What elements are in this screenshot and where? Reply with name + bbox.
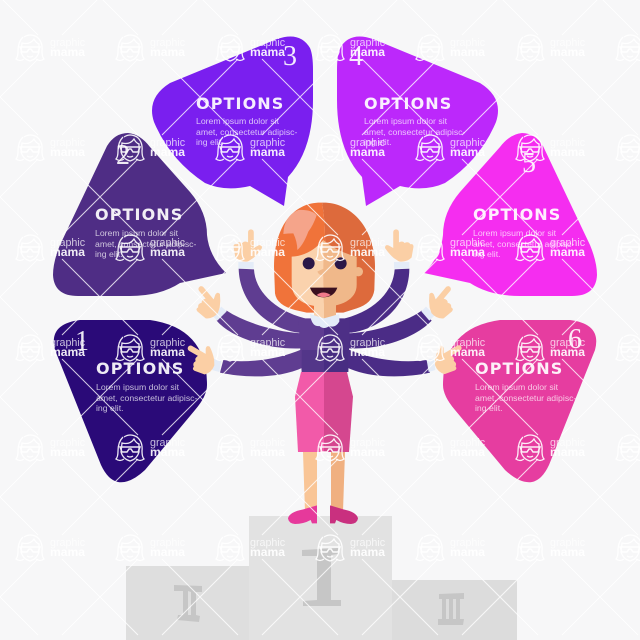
watermark logos: mama <box>50 445 85 459</box>
watermark logos: graphic <box>250 337 286 349</box>
panel: option 6 <box>443 320 596 482</box>
watermark logos: mama <box>450 345 485 359</box>
watermark logos: graphic <box>450 37 486 49</box>
bubble 5 <box>424 133 597 296</box>
watermark logos: graphic <box>350 237 386 249</box>
text 4: amet, consectetur adipisc- <box>364 127 466 137</box>
number 5: 5 <box>522 148 536 179</box>
watermark logos: graphic <box>50 237 86 249</box>
podium: first place step <box>249 516 392 640</box>
watermark logos: graphic <box>250 137 286 149</box>
legs <box>303 452 345 512</box>
watermark logos: graphic <box>550 137 586 149</box>
watermark logos: mama <box>50 145 85 159</box>
heading 3: OPTIONS <box>196 94 284 113</box>
right arms <box>345 269 432 376</box>
text 1: ing elit. <box>96 403 124 413</box>
heading 1: OPTIONS <box>96 359 184 378</box>
text 5: amet, consectetur adipisc- <box>473 239 575 249</box>
watermark logos: graphic <box>150 437 186 449</box>
watermark logos: mama <box>250 545 285 559</box>
podium: third place step <box>385 580 517 640</box>
text 1: Lorem ipsum dolor sit <box>96 382 180 392</box>
text 2: amet, consectetur adipisc- <box>95 239 197 249</box>
watermark logos: mama <box>150 445 185 459</box>
shoes <box>288 505 358 524</box>
text 5: ing elit. <box>473 249 501 259</box>
text 3: ing elit. <box>196 137 224 147</box>
watermark logos: mama <box>350 545 385 559</box>
watermark logos: mama <box>450 545 485 559</box>
panel: option 4 <box>337 36 498 206</box>
watermark logos: graphic <box>150 137 186 149</box>
watermark logos: mama <box>550 345 585 359</box>
text 3: amet, consectetur adipisc- <box>196 127 298 137</box>
hands and cuffs <box>179 229 470 378</box>
watermark logos: mama <box>150 145 185 159</box>
torso <box>298 318 350 372</box>
watermark logos: mama <box>150 545 185 559</box>
watermark logos: mama <box>150 345 185 359</box>
eyes <box>303 257 347 269</box>
watermark logos: mama <box>350 345 385 359</box>
watermark logos: graphic <box>350 137 386 149</box>
watermark logos: graphic <box>150 537 186 549</box>
watermark logos: graphic <box>450 537 486 549</box>
watermark logos: graphic <box>250 237 286 249</box>
panel: option 5 <box>424 133 597 296</box>
bubble 2 <box>53 133 226 296</box>
watermark logos: mama <box>350 245 385 259</box>
watermark logos: graphic <box>550 537 586 549</box>
watermark logos: graphic <box>450 437 486 449</box>
text 6: ing elit. <box>475 403 503 413</box>
watermark logos: mama <box>550 45 585 59</box>
number 4: 4 <box>349 41 363 72</box>
watermark logos: graphic <box>550 437 586 449</box>
watermark logos: graphic <box>450 337 486 349</box>
watermark logos: graphic <box>250 437 286 449</box>
watermark logos: mama <box>450 45 485 59</box>
text 2: Lorem ipsum dolor sit <box>95 228 179 238</box>
watermark logos: graphic <box>450 237 486 249</box>
text 4: Lorem ipsum dolor sit <box>364 116 448 126</box>
watermark logos: mama <box>250 445 285 459</box>
podium numeral III <box>438 593 464 625</box>
podium numeral II <box>174 585 202 622</box>
text 6: Lorem ipsum dolor sit <box>475 382 559 392</box>
watermark logos: mama <box>250 245 285 259</box>
watermark logos: graphic <box>350 437 386 449</box>
character: woman with six arms <box>179 203 470 524</box>
watermark logos: mama <box>550 545 585 559</box>
watermark logos: graphic <box>50 437 86 449</box>
panel: option 3 <box>152 36 313 206</box>
panel: option 2 <box>53 133 226 296</box>
watermark logos: graphic <box>50 37 86 49</box>
watermark logos: graphic <box>150 37 186 49</box>
watermark logos: graphic <box>350 337 386 349</box>
watermark logos: graphic <box>550 37 586 49</box>
panel: option 1 <box>54 320 207 482</box>
watermark logos: graphic <box>50 337 86 349</box>
watermark logos: mama <box>350 45 385 59</box>
watermark logos: mama <box>250 145 285 159</box>
number 6: 6 <box>568 324 582 355</box>
number 2: 2 <box>116 140 130 171</box>
collar <box>310 314 339 328</box>
left arms <box>217 269 305 376</box>
heading 5: OPTIONS <box>473 205 561 224</box>
watermark logos: graphic <box>50 537 86 549</box>
watermark logos: graphic <box>450 137 486 149</box>
text 6: amet, consectetur adipisc- <box>475 393 577 403</box>
watermark logos: mama <box>150 45 185 59</box>
watermark logos: mama <box>450 445 485 459</box>
watermark logos: mama <box>450 245 485 259</box>
watermark logos: mama <box>50 245 85 259</box>
watermark logos: mama <box>350 445 385 459</box>
neck <box>314 303 336 318</box>
watermark logos: mama <box>550 445 585 459</box>
podium <box>126 516 517 640</box>
watermark logos: graphic <box>250 37 286 49</box>
watermark logos: graphic <box>550 337 586 349</box>
watermark logos: graphic <box>550 237 586 249</box>
text 3: Lorem ipsum dolor sit <box>196 116 280 126</box>
bubble 1 <box>54 320 207 482</box>
watermark logos: mama <box>550 245 585 259</box>
watermark logos: graphic <box>150 237 186 249</box>
watermark logos: graphic <box>50 137 86 149</box>
watermark logos: mama <box>350 145 385 159</box>
number 1: 1 <box>75 326 89 357</box>
watermark logos: mama <box>450 145 485 159</box>
number 3: 3 <box>283 41 297 72</box>
podium numeral I <box>302 548 341 606</box>
face <box>292 240 363 307</box>
watermark logos: graphic <box>250 537 286 549</box>
watermark logos: mama <box>50 345 85 359</box>
watermark logos: mama <box>150 245 185 259</box>
heading 4: OPTIONS <box>364 94 452 113</box>
skirt <box>295 372 353 452</box>
watermark logos: graphic <box>350 37 386 49</box>
bubble 3 <box>152 36 313 206</box>
text 1: amet, consectetur adipisc- <box>96 393 198 403</box>
hair <box>274 203 375 313</box>
podium: second place step <box>126 566 256 640</box>
text 2: ing elit. <box>95 249 123 259</box>
watermark logos: mama <box>50 545 85 559</box>
text 5: Lorem ipsum dolor sit <box>473 228 557 238</box>
watermark logos: mama <box>250 45 285 59</box>
bubble 4 <box>337 36 498 206</box>
mouth <box>310 288 337 297</box>
heading 6: OPTIONS <box>475 359 563 378</box>
text 4: ing elit. <box>364 137 392 147</box>
watermark logos: mama <box>50 45 85 59</box>
watermark logos: graphic <box>150 337 186 349</box>
watermark logos: mama <box>250 345 285 359</box>
bubble 6 <box>443 320 596 482</box>
heading 2: OPTIONS <box>95 205 183 224</box>
watermark logos: mama <box>550 145 585 159</box>
watermark logos: graphic <box>350 537 386 549</box>
